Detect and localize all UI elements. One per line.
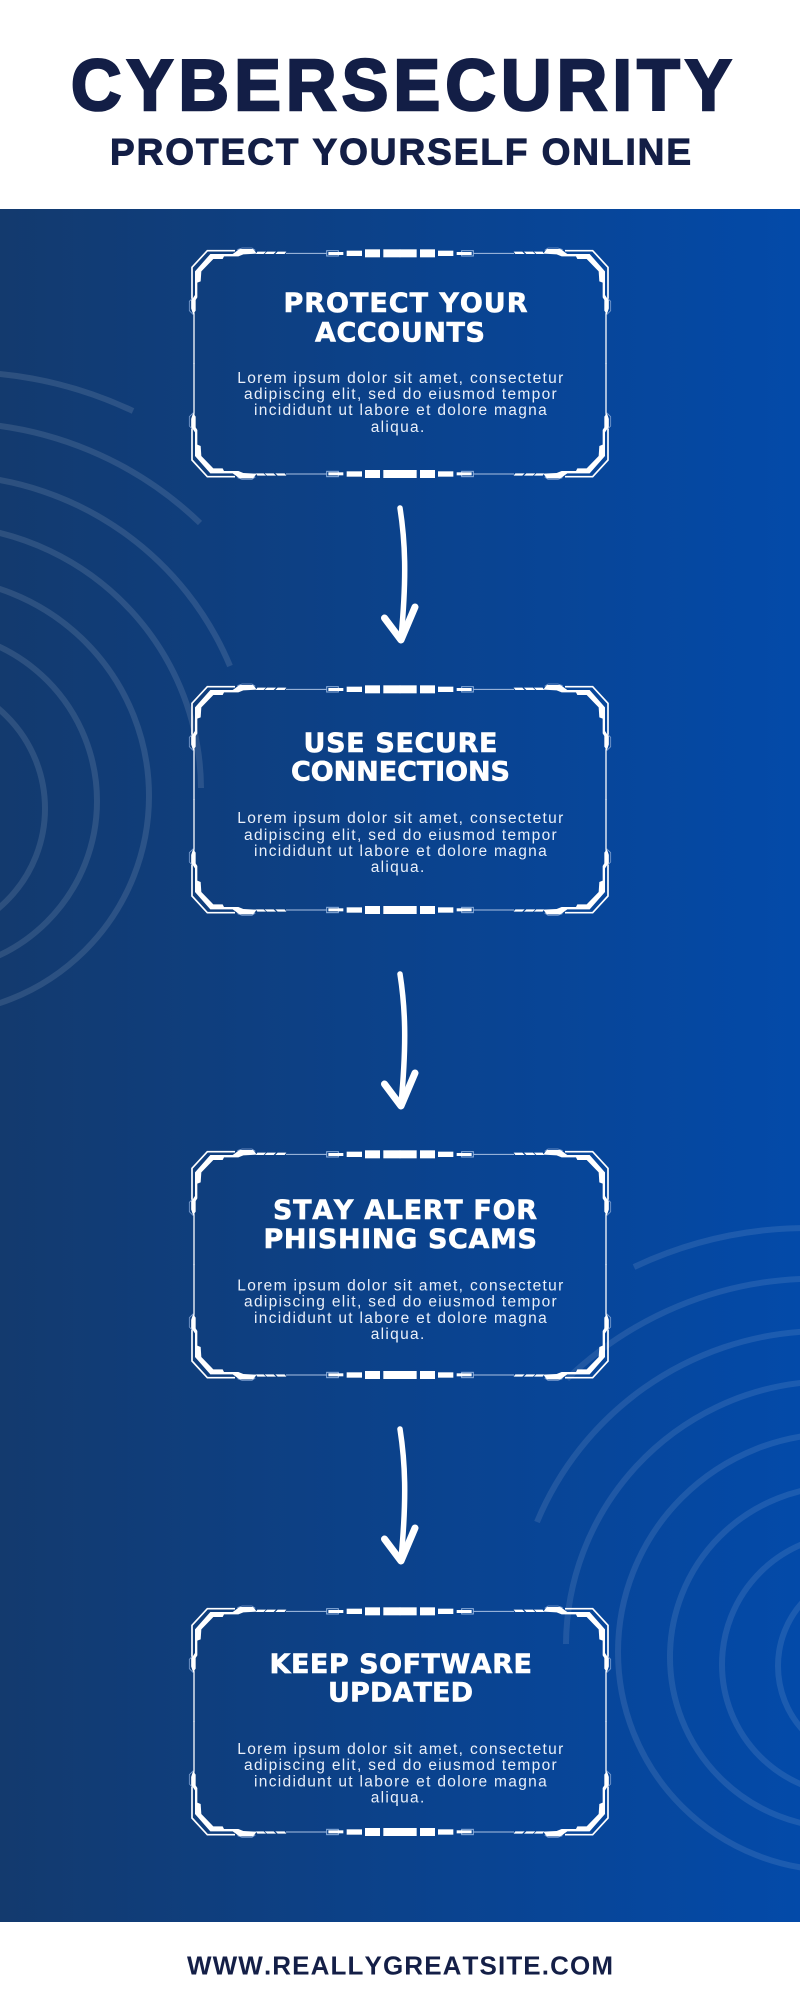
decorative rings left (0, 372, 230, 1014)
card body text: Lorem ipsum dolor sit amet, consectetur (237, 810, 563, 827)
card heading: KEEP SOFTWARE (270, 1649, 532, 1680)
panel: protect your accounts (189, 248, 611, 479)
card body text: aliqua. (371, 1326, 424, 1343)
panel: stay alert for phishing scams (189, 1149, 611, 1380)
card heading (284, 288, 528, 348)
card body text: incididunt ut labore et dolore magna (254, 1774, 547, 1791)
card heading: CONNECTIONS (291, 757, 510, 788)
card heading (291, 728, 510, 788)
card body text: Lorem ipsum dolor sit amet, consectetur (237, 1741, 563, 1758)
card body text: adipiscing elit, sed do eiusmod tempor (244, 386, 557, 403)
card body text: adipiscing elit, sed do eiusmod tempor (244, 827, 557, 844)
card heading: PROTECT YOUR (284, 288, 528, 319)
card body text: Lorem ipsum dolor sit amet, consectetur (237, 370, 563, 387)
card heading: PHISHING SCAMS (264, 1224, 537, 1255)
card body text: aliqua. (371, 1790, 424, 1807)
arrow 1 (384, 508, 415, 640)
card frame (189, 684, 611, 915)
card body text: incididunt ut labore et dolore magna (254, 843, 547, 860)
card heading (264, 1195, 537, 1255)
card body text (237, 370, 563, 436)
card heading (270, 1649, 532, 1708)
title: CYBERSECURITY (71, 46, 732, 126)
card body text (237, 1741, 563, 1807)
decorative rings right (537, 1228, 800, 1870)
footer url: WWW.REALLYGREATSITE.COM (187, 1950, 613, 1980)
panel: keep software updated (189, 1606, 611, 1837)
header band (0, 0, 800, 209)
card body text: adipiscing elit, sed do eiusmod tempor (244, 1294, 557, 1310)
arrow 2 (384, 974, 415, 1106)
card frame (189, 248, 611, 479)
card body text: aliqua. (371, 419, 424, 436)
card heading: UPDATED (328, 1677, 473, 1708)
card heading: USE SECURE (304, 728, 498, 759)
arrow 3 (384, 1429, 415, 1561)
card body text: incididunt ut labore et dolore magna (254, 1310, 547, 1327)
card heading: STAY ALERT FOR (273, 1195, 537, 1226)
card heading: ACCOUNTS (315, 317, 485, 348)
subtitle: PROTECT YOURSELF ONLINE (110, 132, 691, 172)
card body text (237, 810, 563, 876)
card frame (189, 1606, 611, 1837)
card body text (237, 1278, 563, 1343)
card body text: incididunt ut labore et dolore magna (254, 402, 547, 419)
card body text: Lorem ipsum dolor sit amet, consectetur (237, 1278, 563, 1294)
card body text: adipiscing elit, sed do eiusmod tempor (244, 1757, 557, 1774)
card frame (189, 1149, 611, 1380)
card body text: aliqua. (371, 859, 424, 876)
panel: use secure connections (189, 684, 611, 915)
